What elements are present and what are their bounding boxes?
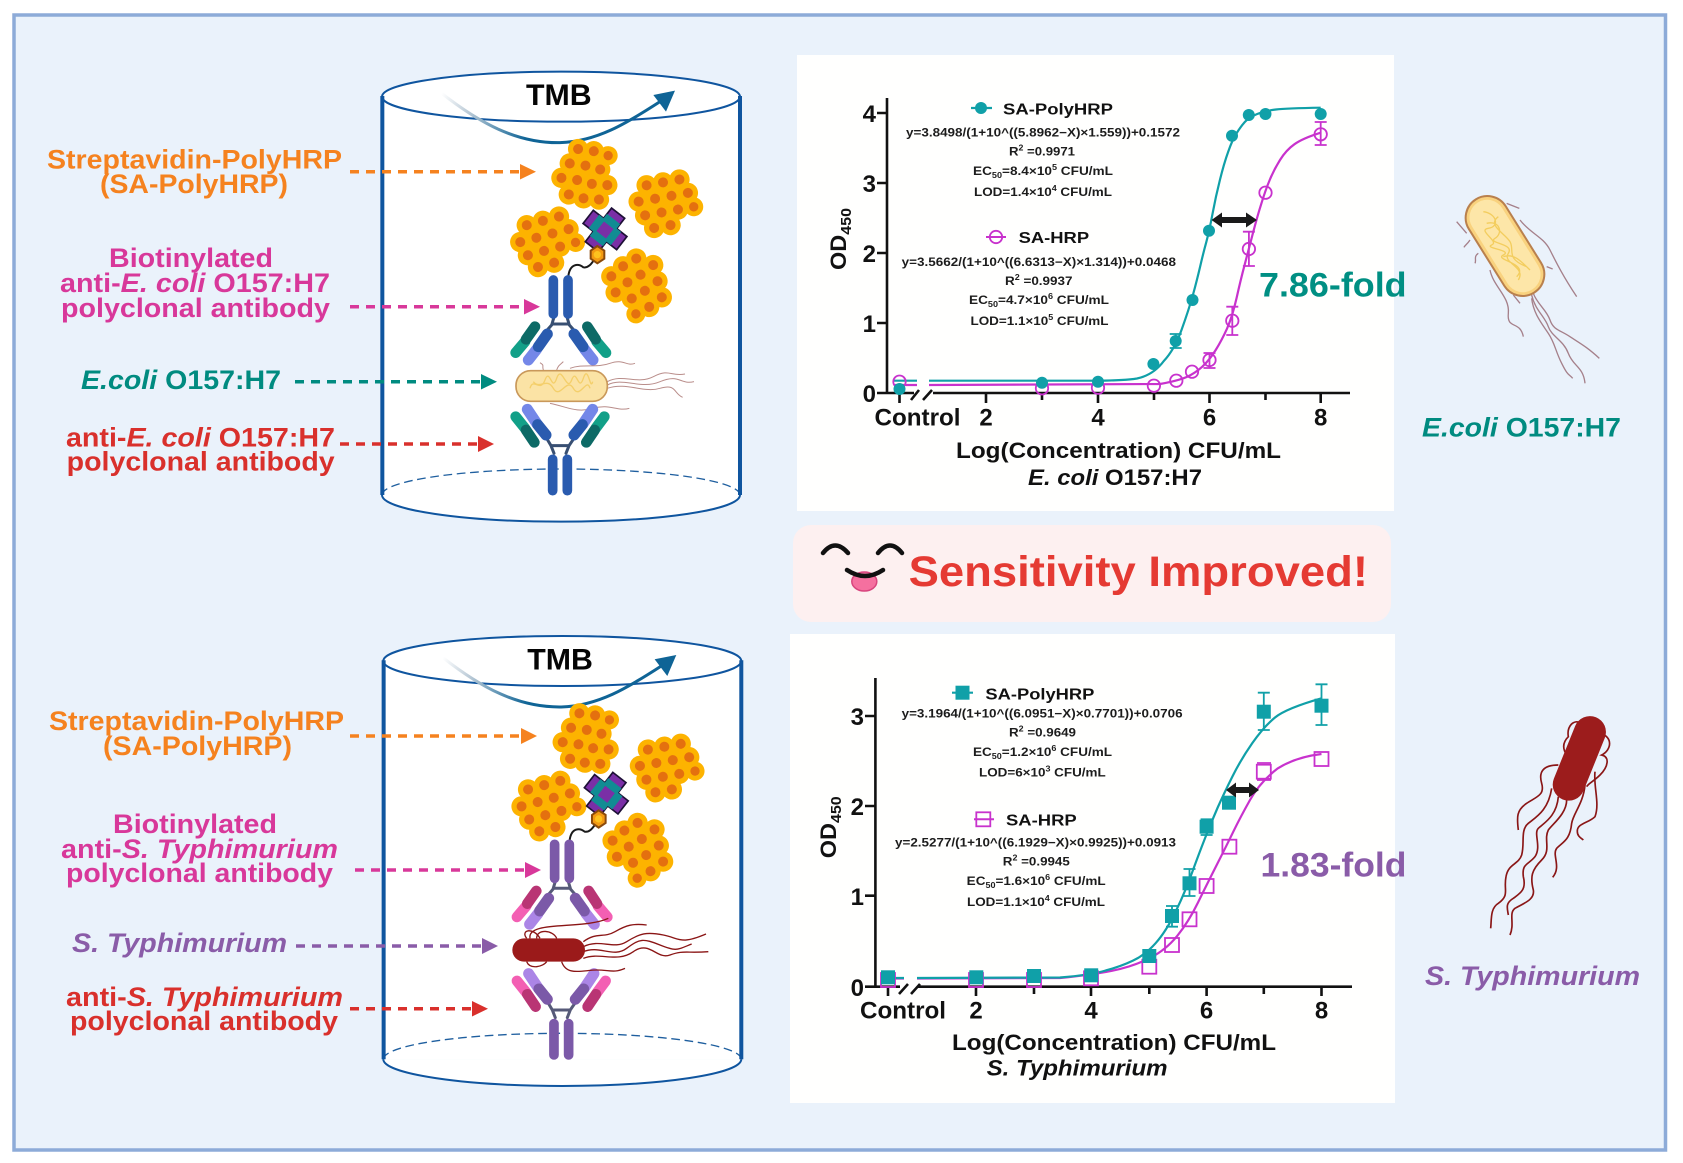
y axis tick labels [851, 704, 864, 1002]
bacterium: E. coli in sandwich [516, 362, 694, 410]
x axis tick labels: 8 [1314, 405, 1327, 432]
curve: SA-HRP [894, 133, 1321, 385]
equation block: SA-HRP: 2 [1012, 854, 1018, 863]
equation block: SA-PolyHRP: =0.9649 [1024, 726, 1076, 740]
arrow: red [340, 436, 494, 452]
legend: SA-PolyHRP [971, 102, 1113, 119]
y axis tick labels: 2 [863, 241, 876, 268]
detection antibody: biotinylated anti-E. coli [516, 280, 606, 360]
label: biotinylated anti-E. coli antibody [60, 243, 330, 323]
arrow: red lower [350, 1001, 488, 1016]
equation block: SA-PolyHRP: EC [973, 745, 990, 759]
banner: Sensitivity Improved [793, 525, 1391, 622]
equation block: SA-PolyHRP: =0.9971 [1023, 145, 1075, 159]
equation block: SA-PolyHRP: 2 [1019, 144, 1024, 153]
illustration: E. coli bacterium [1457, 188, 1599, 383]
callout: 1.83-fold: 1.83-fold [1260, 847, 1406, 885]
axes [865, 678, 1352, 996]
arrow: pink lower [355, 862, 541, 878]
callout: 7.86-fold: 7.86-fold [1259, 267, 1407, 305]
label: S. Typhimurium: S. Typhimurium [72, 928, 287, 958]
equation block: SA-HRP: CFU/mL [1050, 895, 1105, 909]
equation block: SA-PolyHRP: 3 [1045, 765, 1051, 774]
x axis tick labels: 8 [1315, 997, 1328, 1024]
x axis tick labels: 4 [1084, 997, 1098, 1024]
arrow: teal [295, 374, 497, 390]
y axis title: 450 [838, 208, 855, 235]
label: biotinylated anti-E. coli antibody: Biotinylated [109, 243, 273, 273]
label: biotinylated anti-S. Typhimurium antibody: Biotinylated [113, 809, 277, 839]
equation block: SA-HRP [895, 836, 1176, 909]
equation block: SA-PolyHRP: LOD=1.4×10 [974, 185, 1043, 199]
y axis tick labels: 1 [851, 884, 864, 911]
legend: SA-PolyHRP: SA-PolyHRP [1003, 102, 1113, 119]
y axis tick labels: 2 [851, 794, 864, 821]
x axis tick labels [860, 997, 1328, 1024]
y axis tick labels: 1 [863, 311, 876, 338]
equation block: SA-HRP: LOD=1.1×10 [970, 314, 1040, 328]
SA-PolyHRP complex: S. Typhimurium [506, 693, 708, 893]
equation block: SA-HRP: 2 [1015, 273, 1020, 282]
panel: S. Typhimurium assay schematic [383, 636, 741, 1086]
arrow: purple [296, 938, 498, 954]
labels: S. Typhimurium schematic [49, 706, 344, 1036]
y axis tick labels: 3 [851, 704, 864, 731]
data: SA-HRP points [893, 122, 1327, 394]
x axis title: Log(Concentration) CFU/mL [952, 1030, 1276, 1055]
dashed arrows: upper schematic [295, 164, 540, 452]
legend: SA-PolyHRP [952, 686, 1095, 703]
equation block: SA-HRP: =4.7×10 [998, 293, 1048, 307]
data: SA-PolyHRP points [894, 108, 1327, 395]
label: Streptavidin-PolyHRP (lower): Streptavidin-PolyHRP [49, 706, 344, 736]
equation block: SA-HRP: y=3.5662/(1+10^((6.6313−X)×1.314))+0.0468 [902, 255, 1176, 269]
equation block: SA-PolyHRP [902, 707, 1183, 780]
chart: S. Typhimurium dose-response [816, 678, 1406, 1081]
panel: E. coli assay schematic [382, 72, 740, 522]
x axis title [952, 1030, 1276, 1081]
curve: SA-PolyHRP [882, 698, 1322, 978]
label: anti-S. Typhimurium antibody: polyclonal antibody [70, 1006, 338, 1036]
equation block: SA-PolyHRP: CFU/mL [1057, 164, 1113, 178]
label: anti-S. Typhimurium antibody [66, 982, 343, 1036]
y axis title: 450 [828, 796, 845, 823]
equation block: SA-HRP: 50 [988, 300, 999, 309]
x axis tick labels: 6 [1200, 997, 1213, 1024]
equation block: SA-HRP: LOD=1.1×10 [967, 895, 1036, 909]
equation block: SA-HRP: CFU/mL [1053, 314, 1108, 328]
curve: SA-HRP [882, 754, 1322, 978]
dashed arrows: lower schematic [296, 728, 541, 1016]
equation block: SA-HRP: EC [969, 293, 986, 307]
equation block: SA-PolyHRP: EC [973, 164, 990, 178]
chart: E. coli dose-response [826, 98, 1407, 490]
x axis tick labels: 2 [969, 997, 983, 1024]
equation block: SA-PolyHRP: =8.4×10 [1002, 164, 1052, 178]
equation block: SA-PolyHRP: 2 [1019, 725, 1024, 734]
cylinder well: E. coli [382, 72, 740, 522]
equation block: SA-HRP: R [1005, 274, 1014, 288]
x axis title: S. Typhimurium [987, 1056, 1168, 1081]
equation block: SA-PolyHRP: CFU/mL [1057, 185, 1112, 199]
equation block: SA-PolyHRP [906, 126, 1180, 199]
label: Streptavidin-PolyHRP (lower) [49, 706, 344, 761]
curve: SA-PolyHRP [894, 108, 1321, 381]
SA-PolyHRP complex: E. coli [505, 128, 707, 329]
label: anti-S. Typhimurium antibody: anti-S. Typhimurium [66, 982, 343, 1012]
equation block: SA-PolyHRP: =1.2×10 [1002, 745, 1052, 759]
panel: S. Typhimurium chart background [790, 634, 1395, 1103]
equation block: SA-PolyHRP: 6 [1051, 744, 1057, 753]
x axis tick labels: Control [860, 997, 946, 1024]
equation block: SA-PolyHRP: CFU/mL [1050, 766, 1106, 780]
equation block: SA-PolyHRP: CFU/mL [1056, 745, 1112, 759]
capture antibody: anti-S. Typhimurium [517, 974, 606, 1055]
label: biotinylated anti-S. Typhimurium antibody [61, 809, 338, 888]
label: biotinylated anti-S. Typhimurium antibody: polyclonal antibody [66, 858, 333, 888]
x axis tick labels: 4 [1091, 405, 1105, 432]
y axis title: OD [826, 237, 851, 270]
label: S. Typhimurium (right): S. Typhimurium [1425, 961, 1640, 991]
equation block: SA-HRP: 50 [985, 881, 996, 890]
legend: SA-HRP [974, 812, 1077, 830]
label: Streptavidin-PolyHRP: (SA-PolyHRP) [100, 169, 288, 199]
equation block: SA-HRP: 6 [1048, 292, 1054, 301]
x axis tick labels: Control [874, 405, 960, 432]
equation block: SA-PolyHRP: R [1009, 145, 1018, 159]
panel: E. coli chart background [797, 55, 1394, 511]
y axis tick labels [863, 101, 877, 408]
legend: SA-HRP: SA-HRP [1019, 230, 1089, 247]
label: E. coli O157:H7 (right): E.coli O157:H7 [1422, 413, 1621, 443]
capture antibody: anti-E. coli [516, 409, 604, 491]
label: Streptavidin-PolyHRP (lower): (SA-PolyHRP) [103, 731, 292, 761]
x axis title: Log(Concentration) CFU/mL [956, 438, 1281, 463]
y axis tick labels: 3 [863, 171, 876, 198]
label: anti-E. coli antibody [66, 423, 335, 477]
equation block: SA-HRP: 4 [1045, 894, 1050, 903]
double arrow: shift [1226, 782, 1259, 798]
y axis title: OD [816, 825, 841, 858]
banner text: Sensitivity Improved! [909, 548, 1368, 596]
equation block: SA-PolyHRP: 4 [1052, 184, 1057, 193]
label: Streptavidin-PolyHRP [47, 144, 342, 199]
labels: E. coli schematic [47, 144, 342, 477]
detection antibody: biotinylated anti-S. Typhimurium [517, 844, 607, 924]
label: anti-E. coli antibody: anti-E. coli O157:H7 [66, 423, 335, 453]
equation block: SA-HRP [902, 255, 1176, 328]
equation block: SA-PolyHRP: 50 [992, 752, 1002, 761]
equation block: SA-PolyHRP: R [1009, 726, 1018, 740]
equation block: SA-HRP: 6 [1045, 873, 1051, 882]
equation block: SA-PolyHRP: 5 [1052, 163, 1058, 172]
illustration: S. Typhimurium bacterium [1491, 711, 1611, 935]
label: biotinylated anti-E. coli antibody: anti-E. coli O157:H7 [60, 268, 330, 298]
equation block: SA-PolyHRP: y=3.8498/(1+10^((5.8962−X)×1.559))+0.1572 [906, 126, 1180, 140]
x axis tick labels: 2 [979, 405, 993, 432]
double arrow: shift [1212, 212, 1257, 228]
y axis tick labels: 0 [863, 381, 876, 408]
bacterium: S. Typhimurium in sandwich [512, 918, 708, 971]
equation block: SA-HRP: =0.9945 [1017, 855, 1070, 869]
equation block: SA-HRP: EC [967, 874, 983, 888]
data: SA-HRP points [881, 752, 1328, 987]
data: SA-PolyHRP points [881, 684, 1328, 984]
arrow: orange lower [350, 728, 537, 744]
y axis tick labels: 0 [851, 975, 864, 1002]
label: anti-E. coli antibody: polyclonal antibody [67, 447, 335, 477]
equation block: SA-HRP: y=2.5277/(1+10^((6.1929−X)×0.9925))+0.0913 [895, 836, 1176, 850]
equation block: SA-PolyHRP: y=3.1964/(1+10^((6.0951−X)×0.7701))+0.0706 [902, 707, 1183, 721]
equation block: SA-HRP: 5 [1048, 313, 1054, 322]
equation block: SA-HRP: =1.6×10 [996, 874, 1045, 888]
axes [877, 98, 1350, 403]
icon: smiling face [823, 546, 902, 591]
equation block: SA-HRP: R [1003, 855, 1011, 869]
x axis tick labels [874, 405, 1327, 432]
legend: SA-HRP [986, 230, 1089, 247]
legend: SA-PolyHRP: SA-PolyHRP [985, 686, 1095, 703]
x axis tick labels: 6 [1203, 405, 1216, 432]
label: biotinylated anti-S. Typhimurium antibody: anti-S. Typhimurium [61, 834, 338, 864]
label: E. coli O157:H7: E.coli O157:H7 [81, 365, 281, 395]
x axis title [956, 438, 1281, 490]
label: Streptavidin-PolyHRP: Streptavidin-PolyHRP [47, 144, 342, 174]
equation block: SA-HRP: =0.9937 [1020, 274, 1073, 288]
x axis title: E. coli O157:H7 [1028, 465, 1202, 490]
equation block: SA-PolyHRP: LOD=6×10 [979, 766, 1038, 780]
legend: SA-HRP: SA-HRP [1006, 813, 1077, 830]
arrow: pink [350, 299, 540, 314]
arrow: orange [350, 164, 536, 180]
label: biotinylated anti-E. coli antibody: polyclonal antibody [61, 293, 330, 323]
y axis tick labels: 4 [863, 101, 877, 128]
equation block: SA-HRP: CFU/mL [1053, 293, 1109, 307]
equation block: SA-HRP: CFU/mL [1050, 874, 1106, 888]
equation block: SA-PolyHRP: 50 [992, 171, 1003, 180]
cylinder well: S. Typhimurium [383, 636, 741, 1086]
